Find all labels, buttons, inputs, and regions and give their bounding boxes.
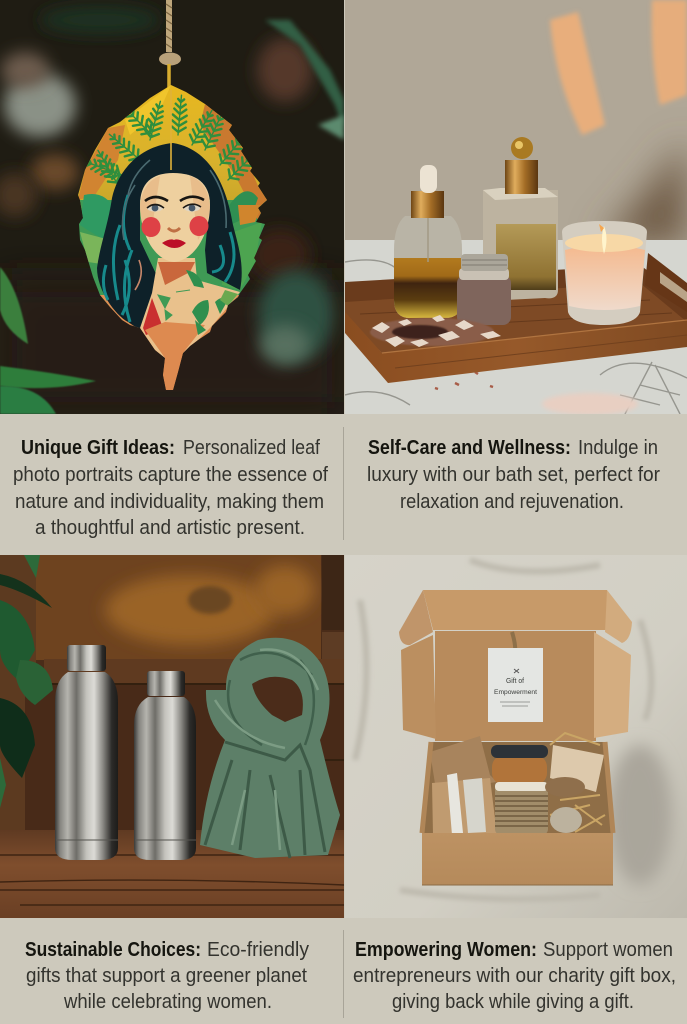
text: sustainable choices: gifts that support a greener planet — [26, 964, 307, 987]
panel: charity gift box photo — [345, 555, 687, 918]
twine wrapped jar — [495, 782, 548, 835]
divider — [343, 930, 344, 1018]
salt jar — [457, 254, 511, 325]
chest leaves — [186, 270, 228, 335]
text: empowering women: Support women — [543, 938, 673, 961]
text: sustainable choices: while celebrating women. — [63, 990, 272, 1013]
gift tag card — [488, 648, 543, 722]
text: unique gift ideas — [13, 436, 328, 539]
panel: self-care bath set photo — [345, 0, 687, 415]
text: self-care and wellness: relaxation and rejuvenation. — [400, 490, 624, 513]
small steel bottle — [134, 671, 196, 860]
box interior — [422, 742, 612, 835]
text: self-care and wellness — [367, 436, 660, 513]
text: unique gift ideas: nature and individuality, making them — [15, 490, 324, 513]
text band: bottom — [0, 918, 687, 1024]
paper wrapped soaps — [430, 736, 497, 835]
text: empowering women — [353, 938, 676, 1013]
candle — [562, 221, 647, 325]
bath salt pile — [370, 315, 501, 347]
gift tag card: Gift of — [506, 678, 524, 685]
neck and chest — [140, 258, 240, 358]
face — [140, 173, 210, 262]
note card and straw — [545, 733, 605, 833]
wall light patches — [550, 0, 687, 135]
text band: top — [0, 414, 687, 555]
box front — [422, 742, 613, 885]
nose and lips — [168, 228, 180, 231]
perfume bottle — [483, 137, 558, 300]
twine on card — [512, 632, 515, 652]
text: self-care and wellness: Indulge in — [578, 436, 658, 459]
text: self-care and wellness: luxury with our bath set, perfect for — [367, 463, 660, 486]
marble surface — [345, 240, 687, 415]
large steel bottle — [55, 645, 118, 860]
foliage — [0, 555, 53, 808]
amber jar — [491, 745, 548, 785]
text: unique gift ideas: Personalized leaf — [183, 436, 320, 459]
text: unique gift ideas: photo portraits capture the essence of — [13, 463, 328, 486]
tray — [345, 253, 687, 383]
gift tag card: Empowerment — [494, 689, 537, 696]
text: empowering women: giving back while giving a gift. — [392, 990, 634, 1013]
box lid — [399, 590, 632, 741]
cheeks — [142, 217, 160, 237]
illustrated leaf portrait — [78, 85, 267, 390]
text: empowering women: Empowering Women: — [355, 938, 537, 961]
divider — [343, 427, 344, 540]
green scarf — [200, 638, 340, 858]
panel: leaf portrait photo — [0, 0, 344, 414]
text: sustainable choices — [25, 938, 310, 1013]
text: sustainable choices: Eco-friendly — [207, 938, 310, 961]
wooden planks — [25, 659, 344, 830]
icon: foliage at left edge — [0, 267, 96, 414]
brows and eyes — [145, 197, 204, 201]
text: sustainable choices: Sustainable Choices: — [25, 938, 201, 961]
icon: twine and knot — [159, 0, 181, 88]
text: unique gift ideas: a thoughtful and artistic present. — [35, 516, 305, 539]
panel: sustainable bottles and scarf photo — [0, 555, 344, 918]
table — [0, 830, 344, 918]
hair — [97, 143, 242, 330]
text: unique gift ideas: Unique Gift Ideas: — [21, 436, 175, 459]
text: self-care and wellness: Self-Care and Wellness: — [368, 436, 571, 459]
dropper bottle — [394, 165, 462, 318]
